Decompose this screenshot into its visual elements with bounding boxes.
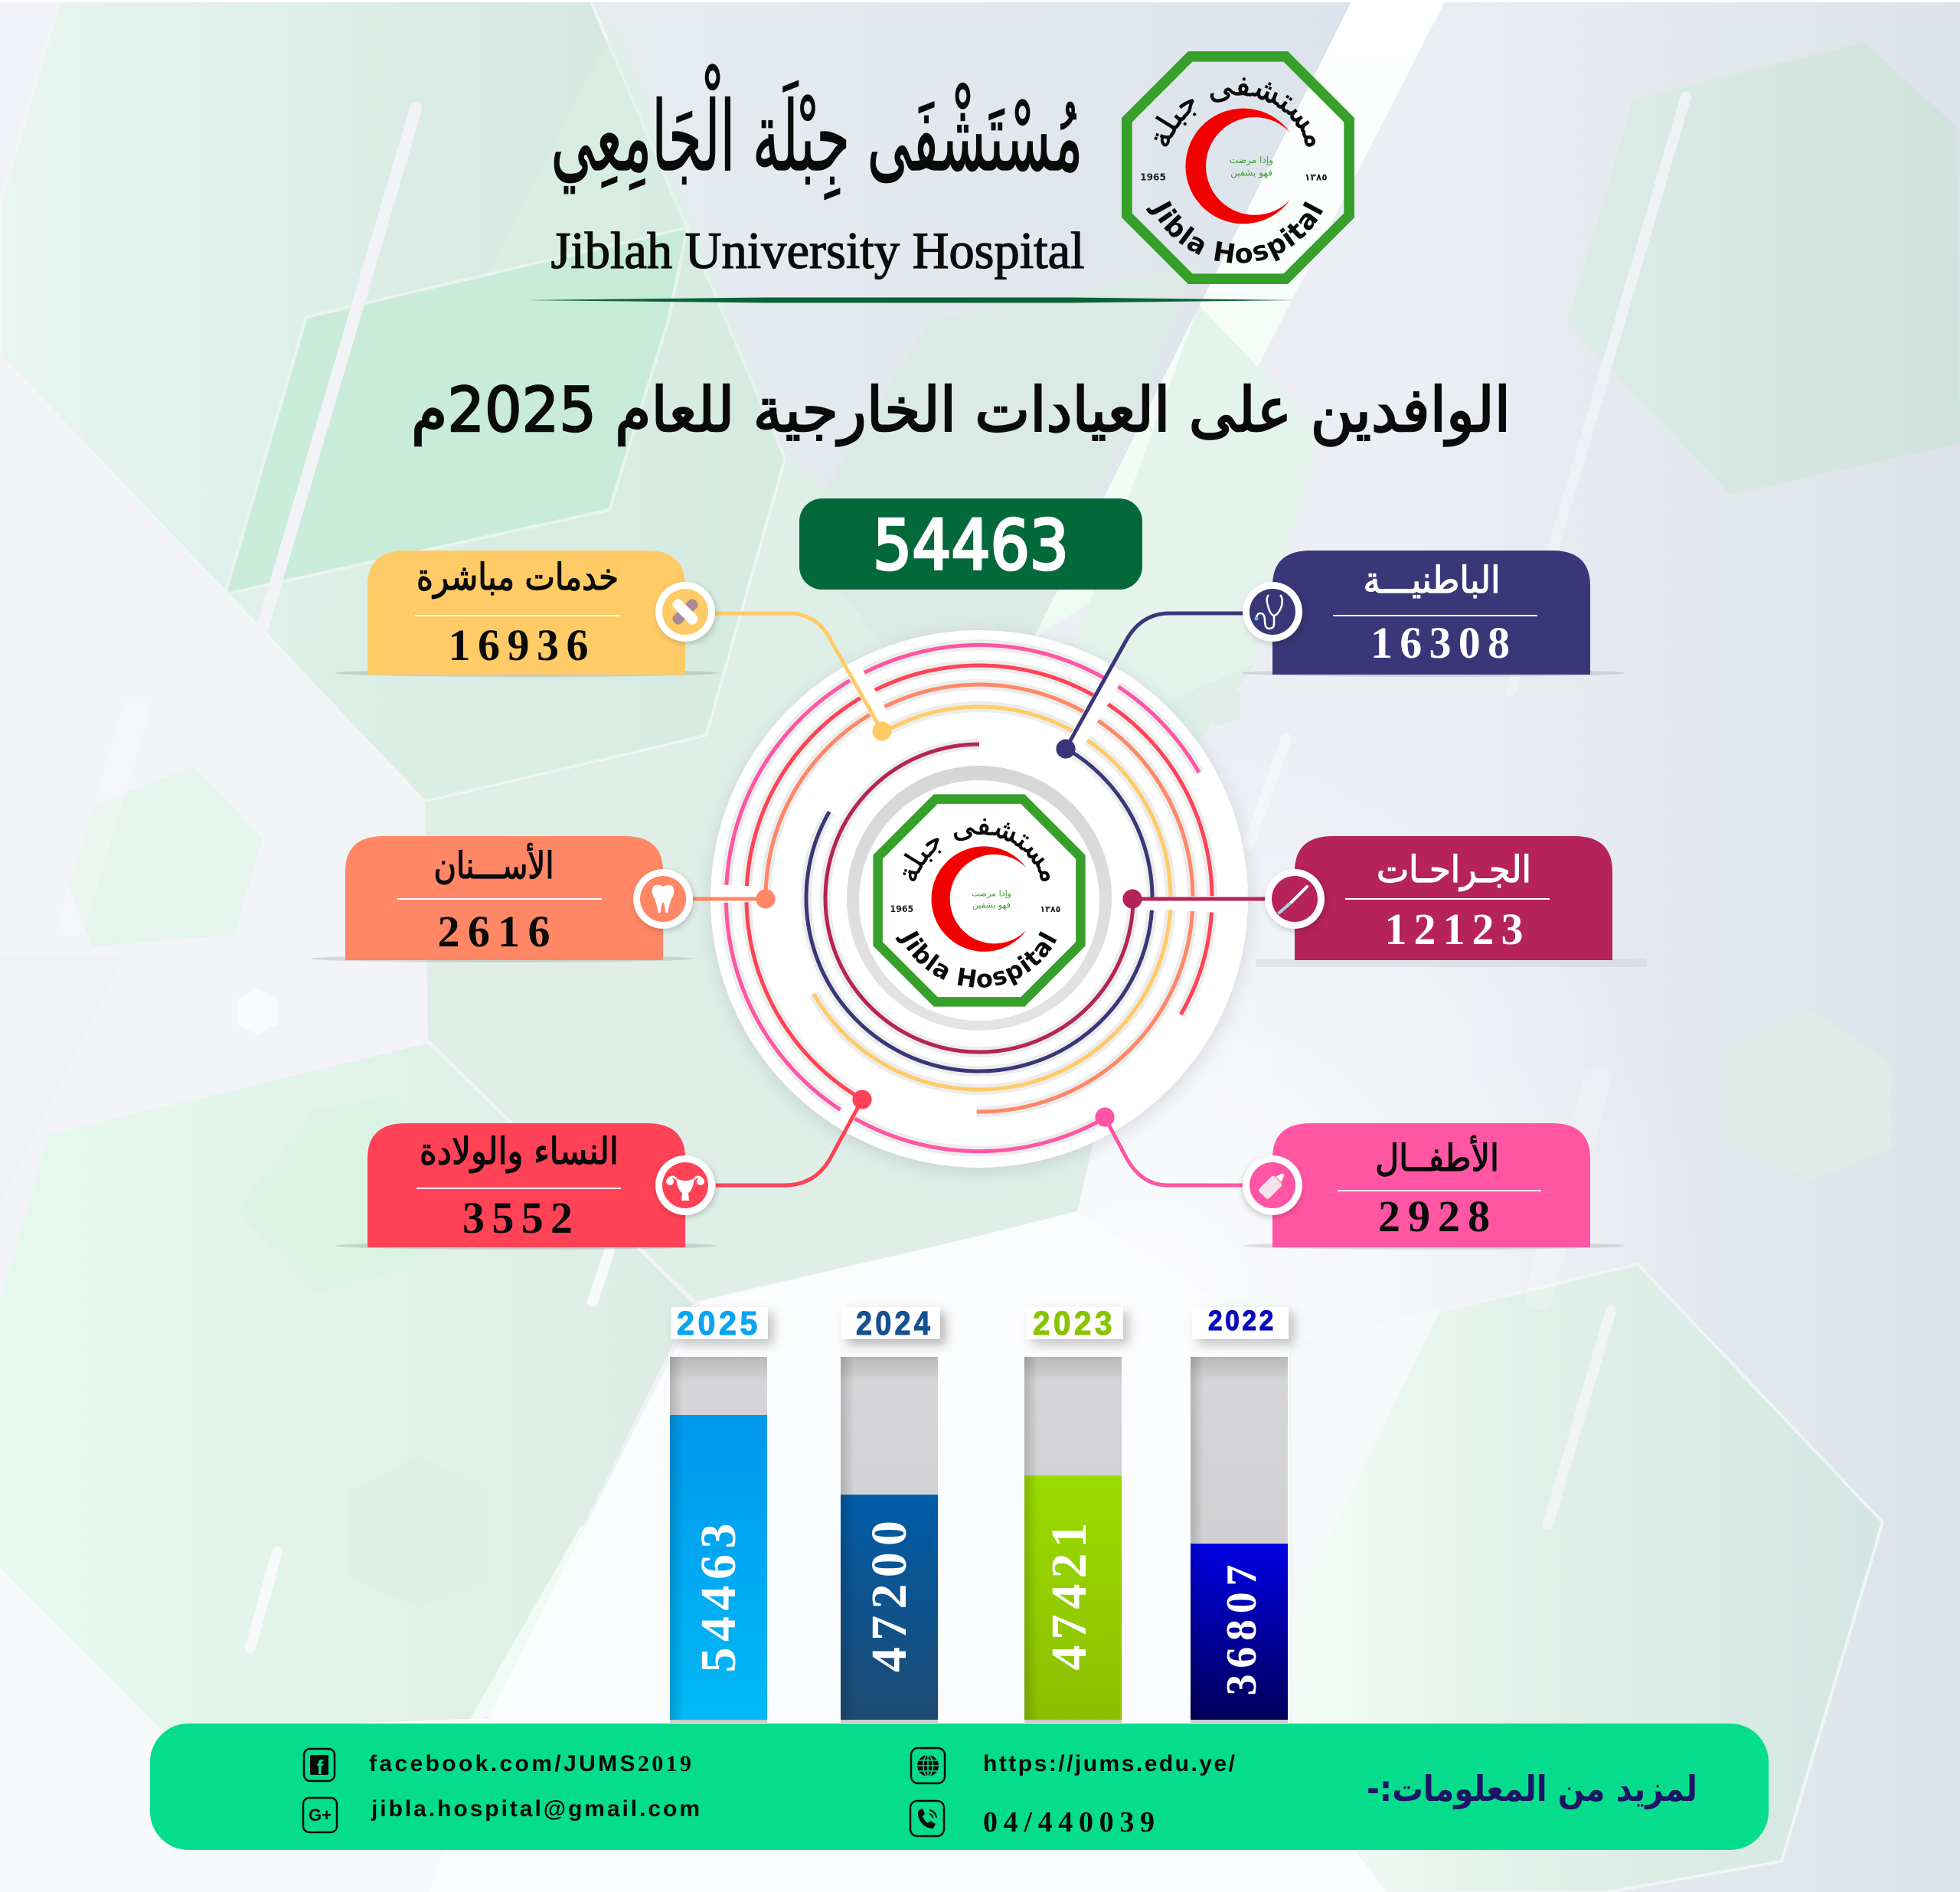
header underline: [525, 297, 1295, 303]
footer band: [150, 1724, 1769, 1850]
card: internal medicine: الباطنيـــة: [1363, 559, 1501, 602]
red ring: [657, 576, 1302, 1220]
card: dentistry: الأســـنان: [433, 842, 554, 887]
logo top: وإذا مرضت: [1230, 155, 1273, 166]
card: surgery: [1256, 836, 1646, 967]
bar 2025: 54463: [691, 1524, 746, 1672]
bar 2023: 47421: [1041, 1522, 1097, 1671]
logo top: ١٣٨٥: [1305, 172, 1328, 183]
card: direct services: خدمات مباشرة: [416, 556, 619, 599]
bar 2022: 2022: [1208, 1305, 1276, 1336]
bar chart: [670, 1305, 1289, 1723]
website text: https://jums.edu.ye/: [983, 1751, 1236, 1776]
bar 2025: [670, 1305, 768, 1723]
maroon ring: [825, 744, 1133, 1052]
bar 2023: 2023: [1033, 1305, 1116, 1342]
bar 2023: [1024, 1305, 1123, 1723]
radial chart: [629, 547, 1330, 1249]
logo center: وإذا مرضت: [972, 888, 1011, 898]
icon: google plus: G+: [309, 1805, 332, 1825]
card: surgery: 12123: [1384, 904, 1524, 954]
navy ring: [743, 662, 1216, 1135]
bar 2025: 2025: [677, 1305, 761, 1342]
logo center: مستشفى جبلة: [903, 818, 1050, 882]
facebook text: facebook.com/JUMS2019: [369, 1751, 691, 1776]
bar 2022: [1191, 1305, 1289, 1723]
card: obstetrics: 3552: [462, 1193, 573, 1243]
card: surgery: الجـراحـات: [1377, 848, 1531, 891]
logo top: 1965: [1140, 172, 1166, 183]
card: dentistry: [311, 836, 694, 962]
icon: facebook: [304, 1749, 335, 1781]
logo top: مستشفى جبلة: [1154, 77, 1315, 147]
coral ring: [683, 602, 1276, 1194]
card: pediatrics: الأطفــال: [1375, 1135, 1499, 1180]
icon: facebook: f: [317, 1756, 324, 1779]
footer label: لمزيد من المعلومات:-: [1367, 1768, 1697, 1809]
icon: bandage: [655, 582, 715, 642]
logo top: فهو يشفين: [1230, 168, 1272, 179]
icon: google plus: [303, 1798, 337, 1832]
card: internal medicine: 16308: [1370, 618, 1510, 668]
bar 2024: [841, 1305, 940, 1723]
card: dentistry: 2616: [438, 907, 550, 956]
logo center: [873, 794, 1086, 1007]
logo center: ١٣٨٥: [1040, 904, 1061, 914]
logo top: Jibla Hospital: [1145, 201, 1323, 263]
card: direct services: [335, 551, 718, 677]
card: direct services: 16936: [449, 620, 588, 670]
ring halos: [629, 547, 1330, 1249]
connectors and dots: [693, 613, 1267, 1185]
main title: الوافدين على العيادات الخارجية للعام 2025م: [411, 374, 1511, 446]
logo center: فهو يشفين: [972, 900, 1011, 910]
email text: jibla.hospital@gmail.com: [371, 1796, 700, 1822]
total box: [799, 498, 1142, 590]
icon: uterus: [655, 1155, 715, 1215]
icon: globe: [911, 1748, 945, 1783]
bar 2022: 36807: [1218, 1565, 1266, 1695]
bar 2024: 47200: [861, 1521, 917, 1672]
icon: scalpel: [1265, 869, 1325, 929]
icon: tooth: [633, 869, 693, 929]
pink ring: [629, 547, 1330, 1249]
logo center: Jibla Hospital: [896, 931, 1057, 988]
header english name: Jiblah University Hospital: [551, 221, 1084, 279]
header calligraphy title: مُسْتَشْفَى جِبْلَة الْجَامِعِي: [551, 64, 1083, 201]
card: obstetrics: النساء والولادة: [420, 1130, 619, 1173]
logo center: 1965: [890, 904, 913, 914]
card: internal medicine: [1242, 551, 1625, 677]
card: pediatrics: [1230, 1123, 1625, 1250]
icon: phone: [910, 1801, 944, 1836]
icon: stethoscope: [1243, 582, 1302, 642]
logo top: [1122, 51, 1354, 284]
total box: 54463: [873, 505, 1069, 586]
bar 2024: 2024: [856, 1305, 933, 1342]
card: pediatrics: 2928: [1378, 1191, 1490, 1241]
icon: baby bottle: [1230, 1143, 1315, 1227]
phone number: 04/440039: [983, 1806, 1155, 1838]
card: obstetrics: [335, 1123, 718, 1250]
yellow ring: [713, 632, 1246, 1165]
